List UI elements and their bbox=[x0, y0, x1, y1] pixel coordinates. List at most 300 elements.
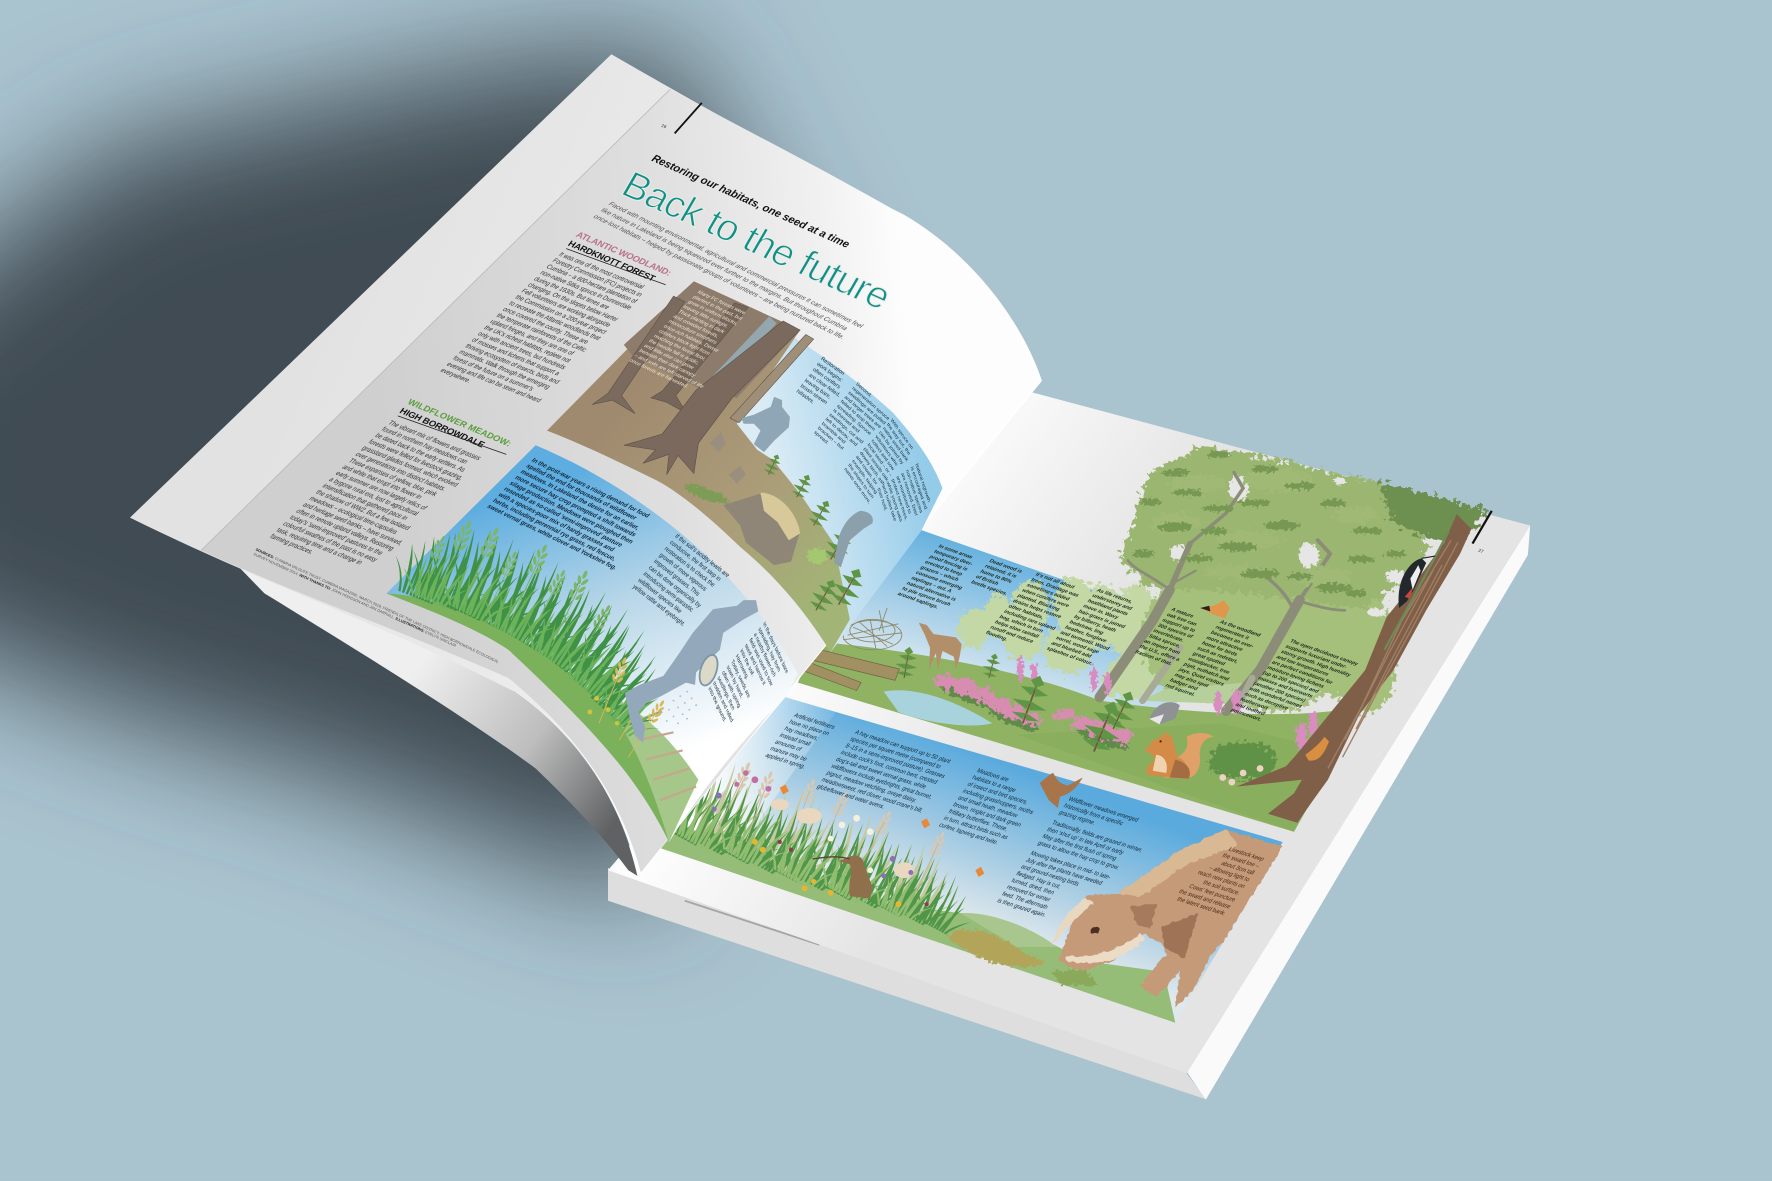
text: wildflower meadow body: the shadow of WW2. But a few isolated bbox=[314, 489, 412, 532]
note: grazing regime: Traditionally, fields are grazed in winter, bbox=[1050, 820, 1144, 854]
panel: wildflower reseeding bbox=[384, 445, 798, 842]
note: plant species: include cock's foot, common bent, crested bbox=[839, 750, 938, 786]
panel: woodland restoration bbox=[547, 281, 943, 652]
ripening yellow grass bbox=[587, 655, 669, 760]
note: drainage: when conifers were bbox=[1019, 588, 1070, 609]
text: Atlantic woodland body: the Commission on a 200-year project bbox=[513, 294, 608, 336]
text: Atlantic woodland body: forest of the future on a summer's bbox=[451, 355, 536, 393]
text: white woodland note: and crowded forests, bbox=[671, 314, 720, 339]
text: gutter seeding note: field was used to sow bbox=[748, 637, 773, 688]
text: second stage note: bracken – but bbox=[816, 426, 845, 452]
text: restoration note: often conifers bbox=[811, 367, 842, 391]
note: plant species: dog's-tail and sweet vernal grass, while bbox=[834, 757, 928, 791]
note: grazing regime: grazing regime. bbox=[1057, 810, 1097, 827]
note: understorey: sorrel, wood sage bbox=[1054, 636, 1100, 655]
text: white woodland note: – and soils are left starved of life bbox=[632, 353, 705, 390]
text: second stage note: is thinned and bbox=[832, 408, 861, 434]
seed-sowing silhouette bbox=[625, 600, 758, 742]
note: drainage: trees. Drainage was bbox=[1029, 577, 1080, 598]
text: second stage note: and larger trees are bbox=[843, 395, 882, 430]
text: white woodland note: the needle fall is acidic, bbox=[647, 339, 701, 366]
text: wildflower meadow body: colourful swathes of the past is no easy bbox=[281, 521, 379, 564]
foxgloves bbox=[1017, 657, 1318, 752]
text: second stage note: felled to stop them bbox=[839, 399, 876, 432]
note: deer fencing: consume emerging bbox=[914, 570, 964, 591]
note: drainage: runoff and reduce bbox=[988, 625, 1035, 645]
note: birds: badger and bbox=[1168, 678, 1199, 692]
text: soil acidity note: wildflower species like bbox=[636, 577, 683, 615]
text: white woodland note: monoculture smothers bbox=[667, 319, 718, 346]
note: birds: pipit, nuthatch and bbox=[1182, 662, 1230, 682]
note: mature oak: support up to bbox=[1160, 618, 1197, 634]
note: fertilisers: manure may be bbox=[768, 746, 808, 763]
text: third stage note: native seed bank bbox=[882, 426, 909, 463]
note: drainage: sometimes added bbox=[1025, 583, 1071, 602]
note: understorey: and bluebell add bbox=[1049, 641, 1093, 659]
note: birds: jays. Quiet visitors bbox=[1176, 667, 1225, 687]
text: post-war history: meadows. In Lakeland the desire for an earlier, bbox=[519, 469, 641, 531]
text: post-war history: spelled the end for thousands of wildflower bbox=[524, 463, 639, 522]
text: gutter seeding note: seed and harrow it bbox=[743, 642, 766, 688]
meadow flowers bbox=[712, 770, 984, 907]
planter silhouette bbox=[834, 511, 873, 567]
text: second stage note: bramble and bbox=[820, 421, 847, 445]
text: second stage note: regeneration spruce bbox=[850, 386, 891, 422]
note: habitats: fritillary butterflies. These, bbox=[947, 809, 1009, 833]
note: drainage: helps slow rainfall bbox=[993, 620, 1041, 640]
text: wildflower meadow body: and heritage seed banks – have survived, bbox=[300, 502, 404, 547]
woodland sky bbox=[547, 281, 943, 652]
text: second stage note: spreading. Spruce bbox=[835, 404, 872, 437]
text: gutter seeding note: Today, seeds are bbox=[730, 659, 751, 700]
note: deer fencing: around saplings. bbox=[896, 592, 940, 610]
note: dead wood: home to 80% bbox=[978, 569, 1013, 585]
tall grasses dark layer bbox=[384, 509, 690, 741]
text: Atlantic woodland body: the UK's richest habitats, replete not bbox=[482, 325, 572, 364]
note: livestock: – allowing light to bbox=[1207, 865, 1251, 883]
meadow seed heads bbox=[711, 760, 949, 895]
tree canopy base mass bbox=[1120, 446, 1430, 610]
note: livestock: the sward low – bbox=[1221, 853, 1261, 870]
heather bbox=[933, 674, 1132, 753]
meadow grasses light layer bbox=[657, 769, 949, 931]
forest text notes bbox=[896, 544, 1361, 736]
text: fourth stage note: and hollies take bbox=[881, 484, 897, 523]
note: canopy mosses: supports luxuriant under- bbox=[1284, 644, 1348, 670]
note: deer fencing: natural alternative is bbox=[905, 581, 957, 603]
text: soil acidity note: improved grasses. This bbox=[652, 559, 700, 598]
cast shadow of book bbox=[0, 45, 814, 893]
text: gutter seeding note: seedlings, then bbox=[716, 675, 735, 712]
small stumps bbox=[710, 432, 746, 484]
text: third stage note: native once more. bbox=[843, 467, 872, 505]
text: wildflower meadow body: today's 'semi-improved' pastures to the bbox=[287, 514, 385, 557]
text: Atlantic woodland body: Cumbria – a 600-hectare plantation of bbox=[544, 264, 639, 305]
canopy shaded top right bbox=[1379, 480, 1487, 545]
text: wildflower meadow body: farming practices. bbox=[268, 533, 315, 556]
text: wildflower meadow body: often in remote upland valleys. Restoring bbox=[294, 508, 396, 552]
note: birds: home for birds bbox=[1200, 641, 1239, 658]
text: restoration note: brash-strewn bbox=[799, 383, 828, 406]
note: livestock: Cows' feet puncture bbox=[1187, 884, 1237, 904]
canopy leaf shading bbox=[1132, 451, 1407, 597]
note: canopy mosses: pouncewort. bbox=[1229, 708, 1263, 723]
note: deer fencing: erected to keep bbox=[923, 560, 964, 577]
panel: meadow illustration bbox=[643, 697, 1283, 1023]
meadow text notes bbox=[764, 713, 1265, 932]
fallen logs bbox=[805, 649, 900, 691]
heading: wildflower meadow: HIGH BORROWDALE bbox=[398, 406, 487, 449]
spruce trunks bbox=[592, 296, 814, 475]
note: canopy mosses: and low temperatures bbox=[1274, 655, 1330, 677]
distant pale trees bbox=[958, 578, 1161, 698]
foreground oak trunk bbox=[1236, 514, 1471, 823]
blue-grey gap between trunks bbox=[713, 320, 773, 383]
felled stump bbox=[723, 493, 800, 565]
note: canopy mosses: moisture-loving lichens bbox=[1265, 665, 1325, 690]
note: fertilisers: amounts of bbox=[773, 740, 803, 753]
text: soil acidity note: growth of more vigorous bbox=[657, 552, 707, 593]
note: birds: red squirrel. bbox=[1164, 683, 1197, 698]
text: third stage note: collect and sow bbox=[870, 438, 895, 472]
wildflower sky bbox=[386, 445, 798, 842]
grass at cow muzzle bbox=[1051, 970, 1098, 985]
flying bird over meadow bbox=[1040, 773, 1083, 808]
text: soil acidity note: If the soil's acidity levels are bbox=[673, 533, 731, 580]
text: gutter seeding note: often with spring bbox=[721, 670, 741, 710]
note: birds: more attractive bbox=[1204, 635, 1244, 653]
ground strip bbox=[386, 593, 669, 842]
text: third stage note: the slopes to turn bbox=[847, 463, 875, 500]
text: third stage note: local seed – or – bbox=[866, 442, 893, 479]
text: white woodland note: once forests are harvested. bbox=[627, 358, 690, 389]
great spotted woodpecker bbox=[1399, 556, 1435, 608]
note: mature oak: oak tree can bbox=[1165, 612, 1198, 627]
note: birds: such as redstart, bbox=[1195, 646, 1240, 665]
intro paragraph: like nature in Lakeland is being squeezed ever further to the margins. But throughout Cumbria bbox=[599, 208, 849, 332]
text: wildflower meadow body: intensification that gathered pace in bbox=[320, 483, 409, 522]
note: deer fencing: saplings – out. A bbox=[909, 576, 953, 594]
text: white woodland note: reaching the forest floor, bbox=[652, 334, 707, 362]
text: gutter seeding note: trodden and rolled bbox=[712, 680, 734, 724]
text: restoration note: hillsides. bbox=[795, 389, 816, 406]
note: deer fencing: proof fencing is bbox=[928, 554, 969, 572]
dense spruce backdrop bbox=[624, 281, 800, 398]
saplings bbox=[893, 645, 1144, 759]
text: Atlantic woodland body: thriving ecosystem of insects, birds and bbox=[463, 343, 561, 386]
text: Atlantic woodland body: Forestry Commission (FC) projects in bbox=[550, 258, 644, 298]
nuthatch bbox=[1305, 737, 1329, 761]
note: habitats: and small heath, meadow bbox=[956, 795, 1019, 819]
note: habitats: of insect and bird species, bbox=[966, 782, 1029, 806]
note: understorey: bedstraw, ling bbox=[1068, 620, 1105, 636]
note: habitats: including grasshoppers, moths bbox=[961, 789, 1034, 816]
text: white woodland note: once-rich habitats. Dense bbox=[662, 324, 720, 354]
note: dead wood: beetle species. bbox=[969, 580, 1009, 597]
note: understorey: and tormentil. Wood bbox=[1059, 630, 1111, 652]
kicker: Restoring our habitats, one seed at a time bbox=[649, 153, 851, 251]
main tree trunks and branches bbox=[1100, 472, 1345, 711]
text: third stage note: downy birch, ash bbox=[858, 450, 886, 487]
text: soil acidity note: conducive, the first step in bbox=[668, 540, 722, 583]
text: fourth stage note: are monitored to bbox=[895, 475, 912, 515]
text: Atlantic woodland body: once covered the county. These are bbox=[501, 306, 590, 346]
meadow ground and hills bbox=[659, 823, 1175, 1023]
note: grazing regime: is then grazed again. bbox=[995, 898, 1047, 919]
note: grazing regime: Wildflower meadows emerged bbox=[1067, 797, 1139, 824]
sources credits: SOURCES: CUMBRIA WILDLIFE TRUST; CUMBRIA MAGAZINE, MARCH 2018; FRIENDS OF THE LAKE DISTRICT; HIGH BORROWDALE ECOLOGICAL bbox=[256, 548, 498, 664]
text: post-war history: with a species-poor mix of hardy grasses and bbox=[495, 491, 616, 553]
text: white woodland note: grew in uniform blocks, bbox=[686, 300, 739, 327]
tall grasses light layer bbox=[395, 538, 678, 748]
text: post-war history: In the post-war years a rising demand for food bbox=[530, 457, 651, 519]
text: restoration note: are clear-felled, bbox=[807, 372, 842, 399]
note: mature oak: fraction of that. bbox=[1133, 650, 1174, 667]
note: mature oak: the U.S., offers a bbox=[1138, 644, 1182, 663]
text: Atlantic woodland body: during the 1930s. But times are bbox=[532, 276, 611, 311]
note: understorey: heathland plants bbox=[1086, 599, 1129, 617]
note: habitats: curlew, lapwing and twite. bbox=[937, 823, 1000, 846]
text: third stage note: plant sessile oak, bbox=[862, 446, 890, 484]
note: grazing regime: Mowing takes place in mid- to late- bbox=[1029, 851, 1112, 881]
grazing cow bbox=[1052, 830, 1283, 1007]
note: grazing regime: then 'shut up' in late April or early bbox=[1045, 827, 1125, 856]
page tab marker right bbox=[1473, 511, 1492, 544]
note: canopy mosses: (another 200 species) bbox=[1252, 681, 1307, 704]
page number 26: 26 bbox=[661, 123, 668, 129]
text: Atlantic woodland body: It was one of the most controversial bbox=[557, 252, 646, 291]
flying bird bbox=[1200, 600, 1230, 618]
text: Atlantic woodland body: changing. On the slopes below Harter bbox=[525, 282, 620, 323]
note: fertilisers: applied in spring. bbox=[764, 753, 807, 771]
note: birds: woodpecker, tree bbox=[1185, 656, 1231, 676]
note: canopy mosses: (up to 200 species) and bbox=[1261, 671, 1320, 695]
note: fertilisers: have no place on bbox=[787, 720, 830, 737]
note: understorey: understorey and bbox=[1090, 593, 1133, 612]
note: grazing regime: turned, dried, then bbox=[1010, 878, 1055, 896]
note: grazing regime: grass to allow the hay crop to grow. bbox=[1036, 841, 1120, 872]
note: livestock: the latent seed bank. bbox=[1175, 897, 1227, 917]
note: deer fencing: grazers – which bbox=[918, 565, 960, 583]
note: dead wood: Dead wood is bbox=[988, 559, 1024, 574]
page tab marker bbox=[675, 103, 702, 133]
inner sheet fold line bbox=[201, 89, 670, 550]
note: livestock: the soil surface. bbox=[1201, 880, 1241, 897]
note: understorey: by bilberry, heath bbox=[1072, 614, 1117, 633]
text: gutter seeding note: sown by hand, bbox=[725, 664, 744, 701]
text: fourth stage note: Natural regrowth bbox=[914, 463, 931, 504]
note: canopy mosses: and toothed bbox=[1234, 702, 1266, 717]
text: third stage note: volunteers who bbox=[874, 434, 899, 468]
book block: right page stack bbox=[608, 390, 1530, 1100]
meadow pale grass backdrop bbox=[672, 743, 976, 932]
left page inner sheet bbox=[201, 89, 1040, 872]
note: livestock: about 3cm tall bbox=[1220, 861, 1255, 877]
text: wildflower meadow body: found in northern hay meadows can bbox=[379, 426, 470, 466]
text: soil acidity note: introducing semi-parasitic bbox=[642, 571, 694, 614]
illustration credits: SURVEY NOVEMBER 2014. WITH THANKS TO: JOHN HODGSON AND JAN DARRALL. ILLUSTRATIONS: EVELYN SINCLAIR bbox=[254, 552, 456, 647]
scattered seed dots bbox=[666, 691, 697, 724]
note: plant species: pignut, meadow vetchling, oxeye daisy, bbox=[825, 771, 918, 804]
text: white woodland note: conifers block light from bbox=[657, 329, 712, 357]
note: mature oak: invertebrate. bbox=[1151, 628, 1186, 644]
note: fertilisers: instead small bbox=[778, 733, 812, 748]
note: dead wood: retained; it is bbox=[983, 564, 1018, 579]
text: fourth stage note: non-native species bbox=[904, 469, 924, 515]
field with fence strips bbox=[605, 692, 698, 842]
tree canopy front lobes bbox=[1150, 468, 1379, 587]
note: understorey: hair-grass is joined bbox=[1077, 609, 1126, 630]
text: gutter seeding note: spreading, hay from bbox=[757, 626, 781, 674]
note: canopy mosses: are perfect conditions for bbox=[1270, 660, 1334, 686]
note: plant species: 8–15 in a semi-improved pasture). Grasses bbox=[844, 743, 946, 780]
note: mature oak: 300 species of bbox=[1156, 623, 1194, 640]
note: canopy mosses: storey growth. High humidity bbox=[1279, 649, 1352, 678]
text: wildflower meadow body: These expanses of yellow, blue, pink bbox=[347, 458, 439, 498]
note: grazing regime: July after the plants have seeded bbox=[1024, 858, 1103, 887]
text: Atlantic woodland body: evening and life can be seen and heard bbox=[444, 361, 543, 404]
note: fertilisers: hay meadows; bbox=[783, 726, 820, 742]
heading: wildflower meadow: WILDFLOWER MEADOW: bbox=[406, 397, 514, 448]
text: second stage note: seedlings, cut and bbox=[828, 412, 864, 445]
forest sky bbox=[814, 530, 1254, 712]
meadow white fade at gutter bbox=[659, 697, 836, 870]
text: Atlantic woodland body: Fell volunteers are working alongside bbox=[519, 288, 612, 329]
note: birds: becomes an ever- bbox=[1209, 630, 1255, 650]
note: fertilisers: Artificial fertilisers bbox=[792, 713, 836, 731]
note: grazing regime: removed for winter bbox=[1005, 885, 1051, 904]
red squirrel bbox=[1145, 731, 1214, 779]
meadow grasses dark layer bbox=[643, 755, 987, 942]
text: restoration note: Restoration bbox=[819, 356, 846, 377]
note: canopy mosses: featherwort bbox=[1238, 697, 1269, 711]
intro paragraph: Faced with mounting environmental, agricultural and commercial pressures it can sometimes feel bbox=[606, 201, 865, 330]
text: Atlantic woodland body: upland fringes, and they are one of bbox=[488, 319, 576, 357]
text: Atlantic woodland body: everywhere. bbox=[438, 367, 473, 385]
note: mature oak: Sitka spruce, bbox=[1147, 634, 1182, 649]
note: drainage: including rare upland bbox=[1002, 609, 1057, 632]
note: plant species: species per square metre (compared to bbox=[848, 737, 942, 771]
text: wildflower meadow body: task, requiring time and a change in bbox=[274, 527, 364, 566]
text: Atlantic woodland body: of mosses and lichens that support a bbox=[469, 337, 561, 377]
note: plant species: globeflower and water avens. bbox=[815, 784, 886, 811]
note: birds: great spotted bbox=[1191, 651, 1226, 667]
text: fourth stage note: is encouraged and bbox=[909, 466, 928, 511]
note: livestock: reach new plants on bbox=[1196, 870, 1246, 890]
note: deer fencing: In some areas bbox=[937, 544, 974, 560]
badger bbox=[1149, 702, 1180, 724]
note: grazing regime: historically from a specific bbox=[1062, 803, 1124, 827]
text: gutter seeding note: into the ground. bbox=[707, 686, 727, 725]
note: canopy mosses: mosses and liverworts bbox=[1256, 676, 1314, 699]
note: habitats: in turn, attract birds such as bbox=[942, 816, 1009, 841]
text: fourth stage note: protect new trees, bbox=[890, 478, 908, 522]
note: dead wood: of British bbox=[974, 574, 1000, 587]
meadow sky bbox=[659, 697, 1283, 1023]
text: third stage note: the way out, the bbox=[885, 422, 911, 457]
note: plant species: A hay meadow can support up to 50 plant bbox=[853, 730, 952, 765]
text: wildflower meadow body: The vibrant mix of flowers and grasses bbox=[386, 420, 483, 462]
text: Atlantic woodland body: mammals. Walk through the emerging bbox=[457, 349, 552, 391]
underside curl shading of the left page bbox=[226, 554, 637, 876]
text: wildflower meadow body: a bygone rural era, lost to agricultural bbox=[327, 477, 420, 517]
text: wildflower meadow body: early summer are now largely relics of bbox=[333, 470, 428, 512]
saplings bbox=[761, 451, 872, 616]
note: deer fencing: to pile spruce brush bbox=[900, 586, 952, 608]
note: birds: As the woodland bbox=[1218, 620, 1262, 638]
note: habitats: Meadows are bbox=[975, 768, 1010, 784]
text: fourth stage note: are removed. Deer bbox=[900, 472, 919, 518]
text: white woodland note: beneath their dark canopy bbox=[637, 348, 697, 379]
deer bbox=[919, 623, 962, 669]
note: drainage: flooding. bbox=[984, 630, 1009, 643]
note: canopy mosses: The open deciduous canopy bbox=[1288, 639, 1359, 667]
text: restoration note: leaving bare, bbox=[803, 378, 832, 401]
fern clump bbox=[683, 481, 729, 507]
text: soil acidity note: can be done organically by bbox=[647, 565, 702, 609]
text: gutter seeding note: Harrowing. bbox=[734, 653, 749, 682]
text: white woodland note: Thick planting in dark bbox=[676, 309, 726, 335]
text: third stage note: With spruce on bbox=[889, 418, 914, 451]
note: grazing regime: May after the first flush of spring bbox=[1041, 834, 1118, 862]
text: wildflower meadow body: grassland glades formed, which evolved bbox=[360, 445, 460, 489]
text: soil acidity note: yellow rattle and eyebright. bbox=[631, 584, 686, 628]
note: understorey: heather, foxglove bbox=[1063, 625, 1108, 644]
curlew bbox=[813, 855, 872, 898]
text: second stage note: left to decay, and bbox=[824, 417, 859, 448]
left page outer sheet bbox=[130, 54, 1042, 876]
text: soil acidity note: restoration is to check the bbox=[663, 546, 716, 589]
intro paragraph: once-lost habitats – helped by passionate groups of volunteers – are being nurtured back to life. bbox=[591, 214, 846, 341]
text: wildflower meadow body: over generations into distinct habitats. bbox=[353, 451, 448, 493]
text: gutter seeding note: In the days before bare bbox=[762, 621, 789, 676]
heading: Atlantic woodland: HARDKNOTT FOREST bbox=[566, 239, 658, 283]
text: post-war history: more secure hay crop prompted a shift towards bbox=[513, 475, 638, 538]
note: understorey: move in. Wavy bbox=[1081, 604, 1120, 621]
canopy gaps showing the page bbox=[1127, 476, 1406, 617]
text: restoration note: work begins: bbox=[814, 361, 844, 384]
text: Atlantic woodland body: non-native Sitka spruce in Dunnerdale bbox=[538, 270, 634, 311]
note: drainage: drains helps restore bbox=[1011, 599, 1063, 620]
text: post-war history: reseeded as so-called 'semi-improved' pasture bbox=[502, 486, 624, 549]
note: drainage: It's not all about bbox=[1034, 572, 1076, 590]
broad green leaves bbox=[807, 548, 827, 564]
text: third stage note: and rowan, for bbox=[854, 454, 879, 487]
note: plant species: meadowsweet, red clover, wood crane's bill, bbox=[820, 777, 924, 814]
text: gutter seeding note: into the soil. bbox=[739, 648, 755, 679]
panel: forest illustration bbox=[798, 446, 1487, 832]
text: Atlantic woodland body: the temperate rainforests of the Celtic bbox=[494, 313, 589, 354]
text: post-war history: herbs, including perennial rye grass, red fescue, bbox=[491, 498, 618, 562]
text: wildflower meadow body: meadows – ecological time-capsules bbox=[307, 496, 400, 536]
text: Atlantic woodland body: to recreate the Atlantic woodlands that bbox=[507, 300, 602, 342]
note: canopy mosses: with wonderful names bbox=[1246, 686, 1303, 709]
text: second stage note: Second, bbox=[854, 381, 873, 399]
grass seed heads bbox=[410, 518, 615, 670]
text: post-war history: sweet vernal grass, white clover and Yorkshire fog. bbox=[485, 503, 619, 571]
note: drainage: bog, which in turn bbox=[998, 614, 1044, 634]
note: birds: may also spot bbox=[1173, 673, 1210, 689]
text: post-war history: silage production. Meadows were ploughed then bbox=[507, 480, 635, 545]
hay pile bbox=[947, 930, 1045, 967]
note: drainage: planted. Blocking bbox=[1016, 593, 1061, 613]
note: deer fencing: temporary deer- bbox=[932, 549, 974, 567]
note: understorey: splashes of colour. bbox=[1045, 646, 1094, 667]
note: habitats: brown, ringlet and dark green bbox=[951, 802, 1022, 829]
title: Back to the future bbox=[615, 164, 898, 318]
mid-distance canopy behind oak bbox=[1141, 567, 1395, 713]
note: birds: regenerates it bbox=[1214, 625, 1250, 641]
